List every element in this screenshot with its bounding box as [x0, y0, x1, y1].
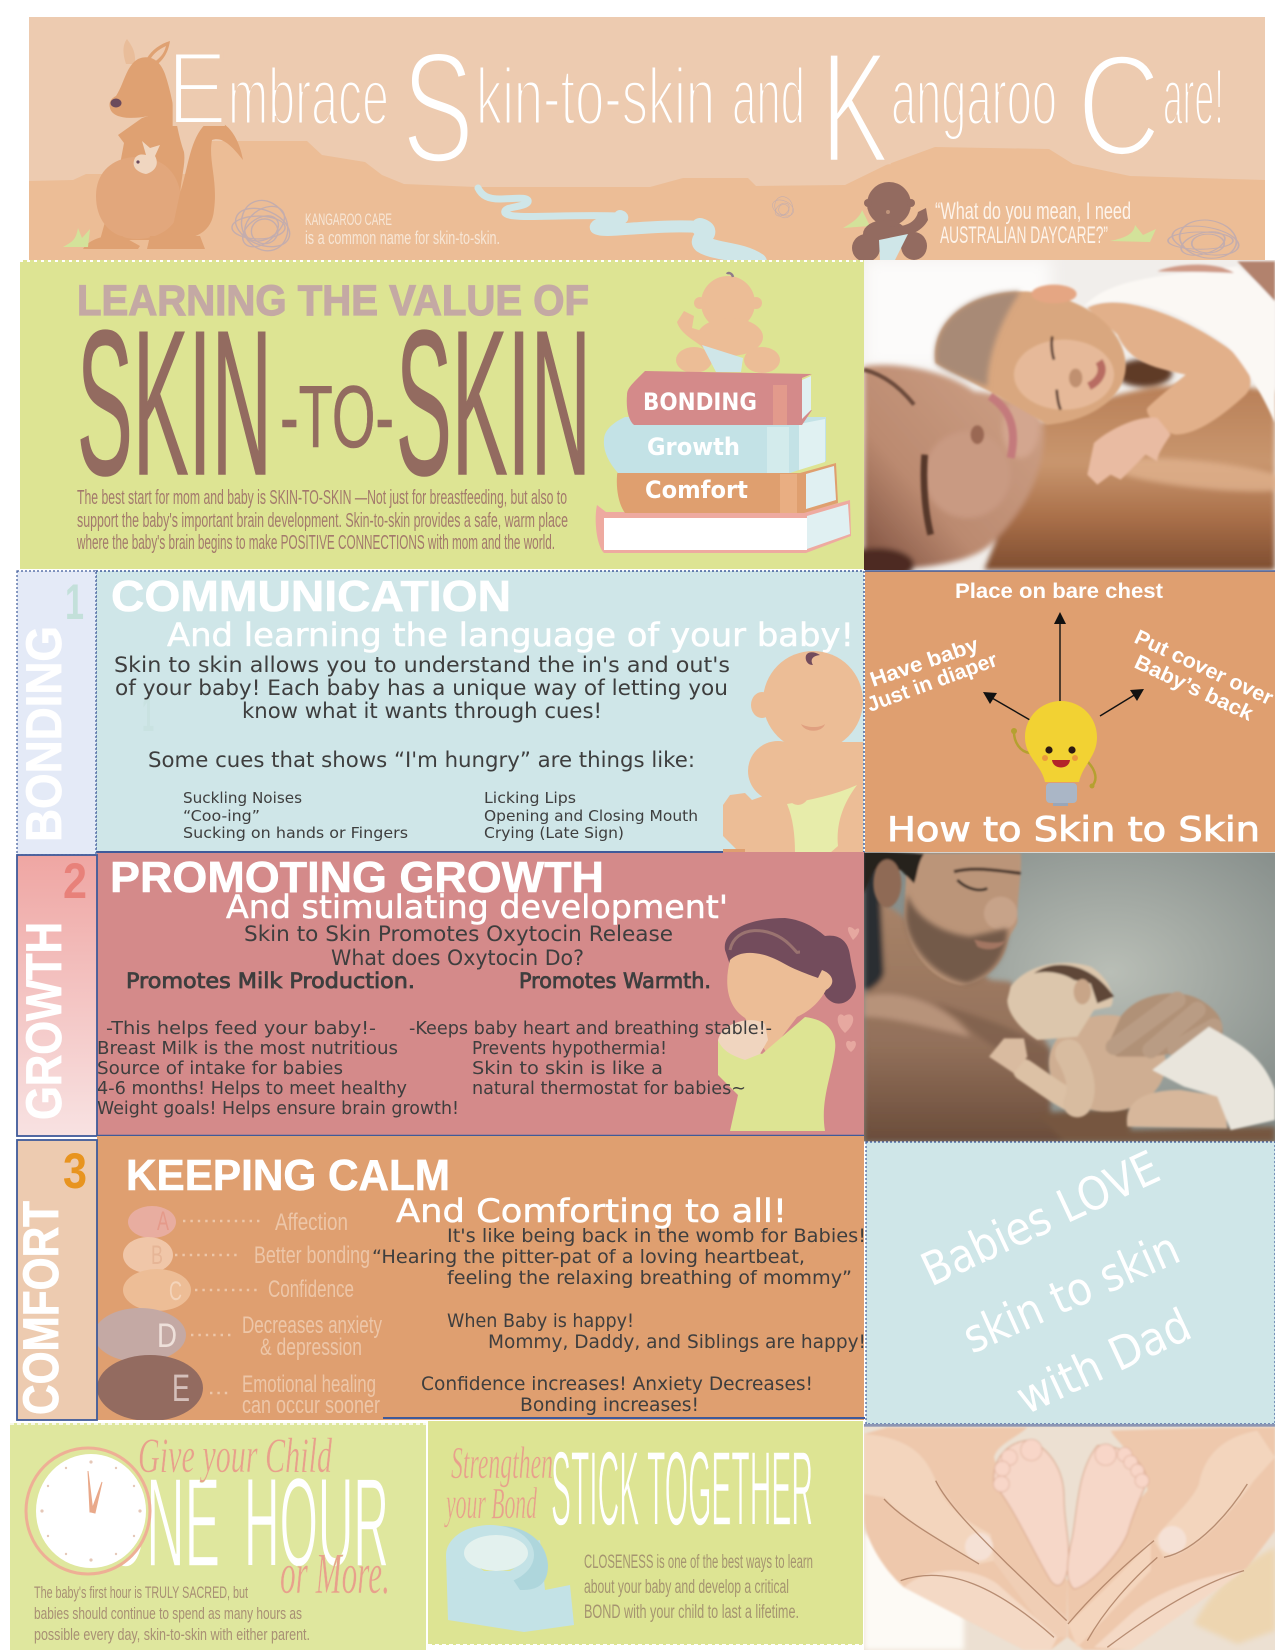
text: intro paragraph [76, 487, 568, 554]
heading: skin-to-skin: SKIN [77, 288, 272, 518]
panel: bonding tab: 1 [65, 574, 84, 630]
text: hunger cue list [183, 789, 698, 842]
text: intro paragraph: support the baby's important brain development. Skin-to-skin provides a safe, warm place [77, 510, 568, 532]
chart: A-to-E benefit stones: & depression [260, 1334, 362, 1361]
text: oxytocin benefits [97, 1018, 772, 1119]
panel: comfort tab [13, 1140, 97, 1420]
text: oxytocin benefits: Weight goals! Helps ensure brain growth! [97, 1098, 459, 1119]
chart: A-to-E benefit stones: can occur sooner [242, 1392, 380, 1419]
title: E [167, 31, 227, 147]
text: book titles: BONDING [643, 388, 757, 416]
text: comfort paragraph: Bonding increases! [520, 1394, 699, 1416]
text: one hour paragraph: babies should continue to spend as many hours as [34, 1604, 302, 1623]
text: comfort paragraph: Mommy, Daddy, and Siblings are happy! [488, 1331, 866, 1353]
panel: communication [96, 571, 864, 853]
panel: keeping calm [94, 1136, 866, 1421]
text: hunger cue list: Sucking on hands or Fingers [183, 824, 408, 842]
text: strengthen your bond: Strengthen [451, 1437, 553, 1488]
subheading: language of your baby: And learning the language of your baby! [167, 616, 854, 654]
text: oxytocin benefits: Prevents hypothermia! [472, 1038, 667, 1059]
title: and [732, 52, 805, 141]
panel: stick together [428, 1421, 863, 1645]
text: book titles [643, 388, 757, 504]
text: have baby just in diaper: Have baby [867, 633, 982, 692]
panel: babies love skin to skin with dad [866, 1140, 1275, 1425]
text: closeness paragraph: BOND with your child to last a lifetime. [584, 1602, 799, 1623]
chart: A-to-E benefit stones: Confidence [268, 1276, 354, 1303]
text: oxytocin benefits: 4-6 months! Helps to meet healthy [97, 1078, 407, 1099]
infographic canvas: HOUR [244, 1452, 389, 1593]
icon: sitting baby [723, 651, 863, 853]
text: kangaroo care note: KANGAROO CARE [305, 210, 392, 229]
text: closeness paragraph: CLOSENESS is one of the best ways to learn [584, 1552, 813, 1573]
panel: how to skin to skin [864, 571, 1275, 852]
text: oxytocin benefits: natural thermostat for babies~ [472, 1078, 746, 1099]
text: hunger cue list: Licking Lips [484, 789, 576, 807]
text: communication paragraph: Skin to skin allows you to understand the in's and out's [114, 653, 730, 677]
photo: hands holding baby feet [864, 1424, 1275, 1650]
icon: small tumbleweed [770, 194, 796, 220]
chart: A-to-E benefit stones: Better bonding [254, 1242, 370, 1269]
text: kangaroo care note: is a common name for skin-to-skin. [305, 228, 500, 248]
text: put cover over baby's back: Baby’s back [1131, 651, 1257, 726]
joey [134, 141, 160, 174]
text: daycare quote [935, 198, 1131, 249]
panel: growth tab: GROWTH [16, 922, 72, 1120]
text: closeness paragraph [584, 1552, 813, 1623]
heading: one hour: ONE [105, 1452, 220, 1593]
text: oxytocin intro: Promotes Warmth. [519, 969, 711, 993]
chart: A-to-E benefit stones: Emotional healing [242, 1371, 376, 1398]
chart: A-to-E benefit stones [94, 1206, 382, 1421]
text: oxytocin intro: What does Oxytocin Do? [331, 946, 584, 970]
text: communication paragraph: Some cues that shows “I'm hungry” are things like: [148, 748, 695, 772]
text: communication paragraph: of your baby! Each baby has a unique way of letting you [115, 676, 728, 700]
panel: header banner [29, 17, 1265, 263]
text: comfort paragraph: feeling the relaxing breathing of mommy” [447, 1267, 852, 1289]
chart: A-to-E benefit stones: A [157, 1206, 169, 1236]
text: communication paragraph: know what it wants through cues! [242, 699, 602, 723]
icon: tumbleweed right [1164, 215, 1247, 263]
text: book titles: Growth [647, 433, 740, 461]
text: hunger cue list: Opening and Closing Mouth [484, 807, 698, 825]
text: daycare quote: “What do you mean, I need [935, 198, 1131, 225]
subheading: stimulating development: And stimulating development' [226, 888, 728, 926]
panel: growth tab [16, 853, 97, 1136]
icon: tumbleweed left [229, 194, 296, 257]
title: K [821, 20, 889, 196]
photo: father with newborn [864, 850, 1275, 1142]
text: strengthen your bond: your Bond [444, 1479, 537, 1528]
river [478, 188, 758, 262]
text: hunger cue list: Suckling Noises [183, 789, 302, 807]
title [167, 20, 1224, 196]
icon: stack of books [596, 371, 851, 553]
panel: bonding tab [16, 571, 96, 855]
icon: dark baby [843, 182, 928, 262]
title: S [402, 20, 474, 196]
text: hunger cue list: “Coo-ing” [183, 807, 260, 825]
text: intro paragraph: where the baby's brain begins to make POSITIVE CONNECTIONS with mom and the world. [76, 532, 555, 554]
text: comfort paragraph: “Hearing the pitter-pat of a loving heartbeat, [372, 1246, 805, 1268]
text: oxytocin intro: Skin to Skin Promotes Oxytocin Release [244, 922, 673, 946]
heading: skin-to-skin: -TO- [280, 367, 394, 466]
panel: communication: 1 [142, 686, 154, 742]
heading: communication: COMMUNICATION [111, 572, 511, 621]
panel: promoting growth [97, 852, 864, 1136]
text: comfort paragraph [372, 1225, 866, 1416]
text: oxytocin intro: Promotes Milk Production. [126, 969, 415, 993]
text: oxytocin benefits: -Keeps baby heart and breathing stable!- [409, 1018, 772, 1039]
text: place on bare chest: Place on bare chest [955, 580, 1163, 603]
icon: grass right [1110, 225, 1156, 242]
panel: one hour [10, 1423, 426, 1650]
chart: A-to-E benefit stones: B [151, 1240, 163, 1270]
text: hunger cue list: Crying (Late Sign) [484, 824, 624, 842]
title: angaroo [891, 52, 1057, 141]
chart: A-to-E benefit stones: E [172, 1368, 190, 1410]
text: book titles: Comfort [645, 476, 748, 504]
text: put cover over baby's back: Put cover over [1131, 626, 1275, 710]
tail [170, 121, 243, 240]
text: give your child: Give your Child [138, 1427, 333, 1483]
chart: A-to-E benefit stones: C [169, 1276, 182, 1306]
text: daycare quote: AUSTRALIAN DAYCARE?” [940, 222, 1108, 249]
text: one hour paragraph [34, 1583, 310, 1644]
heading: learning the value of: LEARNING THE VALUE OF [77, 277, 589, 325]
panel: growth tab: 2 [63, 853, 87, 909]
icon: kangaroo with joey [63, 39, 243, 249]
title: C [1077, 25, 1161, 186]
arrows [983, 612, 1144, 720]
text: have baby just in diaper: Just in diaper [864, 648, 1000, 717]
text: comfort paragraph: When Baby is happy! [447, 1310, 634, 1332]
icon: smiling lightbulb [1011, 701, 1097, 806]
panel: comfort tab: 3 [63, 1143, 87, 1199]
panel: bonding tab: BONDING [16, 626, 72, 842]
heading: promoting growth: PROMOTING GROWTH [110, 853, 604, 902]
text: one hour paragraph: The baby's first hour is TRULY SACRED, but [34, 1583, 248, 1602]
panel: babies love skin to skin with dad: with Dad [1008, 1297, 1199, 1425]
subheading: comforting to all: And Comforting to all! [396, 1192, 787, 1230]
panel: comfort tab: COMFORT [13, 1201, 69, 1415]
title: mbrace [228, 52, 389, 141]
chart: A-to-E benefit stones: D [157, 1317, 177, 1355]
icon: clock [26, 1448, 150, 1574]
text: oxytocin benefits: Breast Milk is the most nutritious [97, 1038, 398, 1059]
text: oxytocin intro [126, 922, 711, 993]
text: comfort paragraph: Confidence increases! Anxiety Decreases! [421, 1373, 813, 1395]
text: comfort paragraph: It's like being back in the womb for Babies! [447, 1225, 866, 1247]
title: kin-to-skin [476, 52, 715, 141]
icon: tape roll [446, 1525, 574, 1632]
text: oxytocin benefits: Source of intake for babies [97, 1058, 343, 1079]
grass [63, 228, 90, 247]
text: closeness paragraph: about your baby and develop a critical [584, 1577, 789, 1598]
text: how to skin to skin: How to Skin to Skin [887, 810, 1260, 850]
panel: learning the value of skin-to-skin: SKIN [396, 288, 591, 518]
text: communication paragraph [114, 653, 730, 772]
text: one hour paragraph: possible every day, skin-to-skin with either parent. [34, 1625, 310, 1644]
photo: mother with sleeping baby [841, 258, 1275, 581]
panel: babies love skin to skin with dad: Babies LOVE [913, 1140, 1168, 1297]
icon: mother with ponytail [718, 918, 859, 1131]
panel: babies love skin to skin with dad: skin to skin [955, 1221, 1188, 1364]
chart: A-to-E benefit stones: Decreases anxiety [242, 1312, 382, 1339]
text: oxytocin benefits: Skin to skin is like a [472, 1058, 663, 1079]
text: strengthen your bond [444, 1437, 553, 1528]
text: intro paragraph: The best start for mom and baby is SKIN-TO-SKIN —Not just for breastfeeding, but also to [77, 487, 567, 509]
text: oxytocin benefits: -This helps feed your baby!- [106, 1018, 376, 1039]
text: kangaroo care note [305, 210, 500, 248]
chart: A-to-E benefit stones: Affection [275, 1209, 348, 1236]
icon: baby on books [676, 273, 780, 373]
text: or more: or More. [280, 1541, 390, 1606]
panel: learning the value of skin-to-skin [20, 260, 864, 569]
heading: keeping calm: KEEPING CALM [126, 1151, 450, 1200]
